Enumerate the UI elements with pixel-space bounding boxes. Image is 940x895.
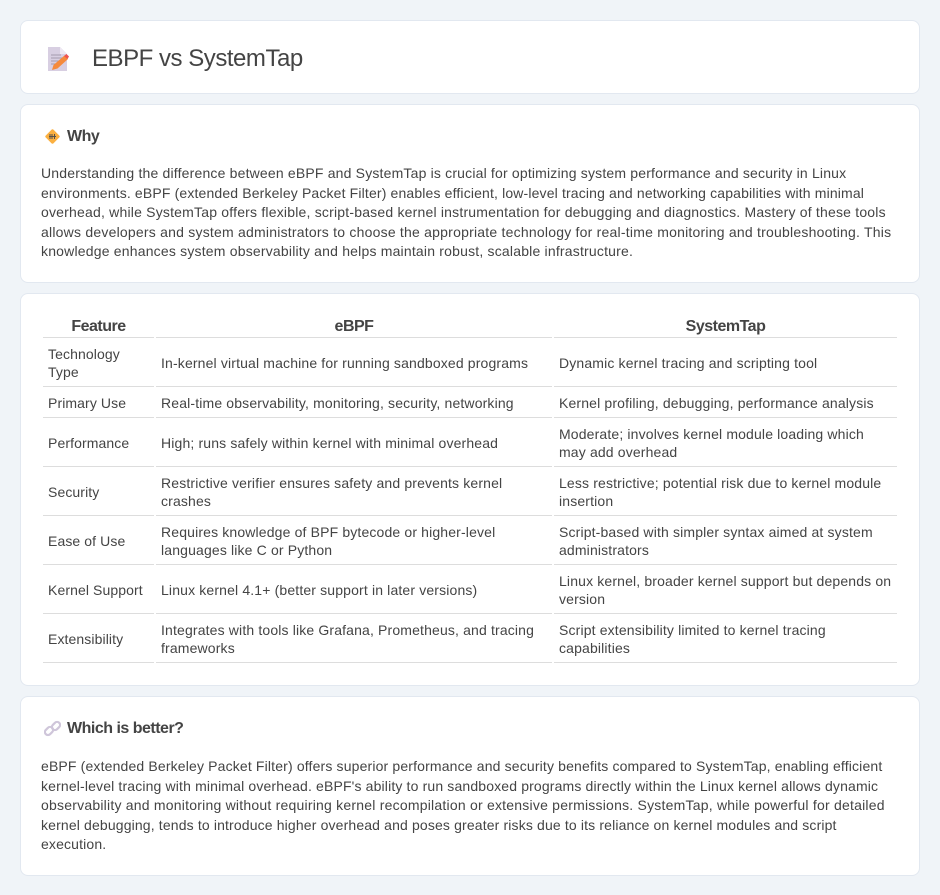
comparison table: Kernel profiling, debugging, performance analysis (559, 395, 874, 411)
panel: title header (20, 20, 920, 94)
icon: diamond sign (45, 129, 60, 144)
comparison table: crashes (161, 493, 211, 509)
text block: verdict: kernel debugging, tends to introduce higher overhead and poses greater risks due to its reliance on kernel modules and script (41, 817, 837, 833)
text block: verdict: kernel-level tracing with minimal overhead. eBPF's ability to run sandboxed programs directly within the Linux kernel allows dynamic (41, 778, 878, 794)
text block: verdict (41, 758, 885, 852)
comparison table: capabilities (559, 640, 630, 656)
comparison table: Script-based with simpler syntax aimed at system (559, 524, 873, 540)
comparison table: languages like C or Python (161, 542, 332, 558)
text block: why explanation (41, 165, 891, 259)
comparison table: Feature (71, 318, 126, 334)
icon: chain link (44, 720, 61, 736)
comparison table: Moderate; involves kernel module loading which (559, 426, 864, 442)
panel: why (20, 104, 920, 283)
comparison table: High; runs safely within kernel with minimal overhead (161, 435, 498, 451)
comparison table: Real-time observability, monitoring, security, networking (161, 395, 514, 411)
comparison table: Security (48, 484, 99, 500)
comparison table: Primary Use (48, 395, 126, 411)
comparison table: Restrictive verifier ensures safety and prevents kernel (161, 475, 502, 491)
heading: why: Why (67, 128, 99, 145)
comparison table: frameworks (161, 640, 235, 656)
text block: why explanation: knowledge enhances system observability and helps maintain robust, scalable infrastructure. (41, 243, 633, 259)
comparison table: Linux kernel 4.1+ (better support in later versions) (161, 582, 477, 598)
text block: verdict: eBPF (extended Berkeley Packet Filter) offers superior performance and security benefits compared to SystemTap, enabling efficient (41, 758, 882, 774)
text block: why explanation: allows developers and system administrators to choose the appropriate technology for real-time monitoring and troubleshooting. This (41, 224, 891, 240)
comparison table: Less restrictive; potential risk due to kernel module (559, 475, 881, 491)
heading: which is better: Which is better? (67, 720, 183, 737)
comparison table: Integrates with tools like Grafana, Prometheus, and tracing (161, 622, 534, 638)
comparison table: Type (48, 364, 79, 380)
title: EBPF vs SystemTap (92, 45, 303, 72)
comparison table: eBPF (335, 318, 373, 334)
panel: which is better (20, 696, 920, 876)
comparison table: version (559, 591, 605, 607)
comparison table: In-kernel virtual machine for running sandboxed programs (161, 355, 528, 371)
text block: why explanation: environments. eBPF (extended Berkeley Packet Filter) enables efficient, low-level tracing and networking capabilities with minimal (41, 185, 864, 201)
comparison table: Performance (48, 435, 129, 451)
comparison table: Requires knowledge of BPF bytecode or higher-level (161, 524, 495, 540)
comparison table: insertion (559, 493, 613, 509)
icon: document with pencil (48, 47, 69, 71)
text block: verdict: execution. (41, 836, 106, 852)
comparison table: Technology (48, 346, 120, 362)
panel: comparison table (20, 293, 920, 686)
comparison table: may add overhead (559, 444, 677, 460)
comparison table (43, 318, 897, 663)
text block: why explanation: overhead, while SystemTap offers flexible, script-based kernel instrumentation for debugging and diagnostics. Mastery of these tools (41, 204, 886, 220)
comparison table: Ease of Use (48, 533, 125, 549)
comparison table: Script extensibility limited to kernel tracing (559, 622, 826, 638)
comparison table: administrators (559, 542, 649, 558)
comparison table: Linux kernel, broader kernel support but depends on (559, 573, 891, 589)
comparison table: Extensibility (48, 631, 123, 647)
comparison table: Dynamic kernel tracing and scripting tool (559, 355, 817, 371)
comparison table: Kernel Support (48, 582, 143, 598)
text block: verdict: observability and monitoring without requiring kernel recompilation or extensive permissions. SystemTap, while powerful for detailed (41, 797, 885, 813)
text block: why explanation: Understanding the difference between eBPF and SystemTap is crucial for optimizing system performance and security in Linux (41, 165, 846, 181)
comparison table: SystemTap (686, 318, 765, 334)
